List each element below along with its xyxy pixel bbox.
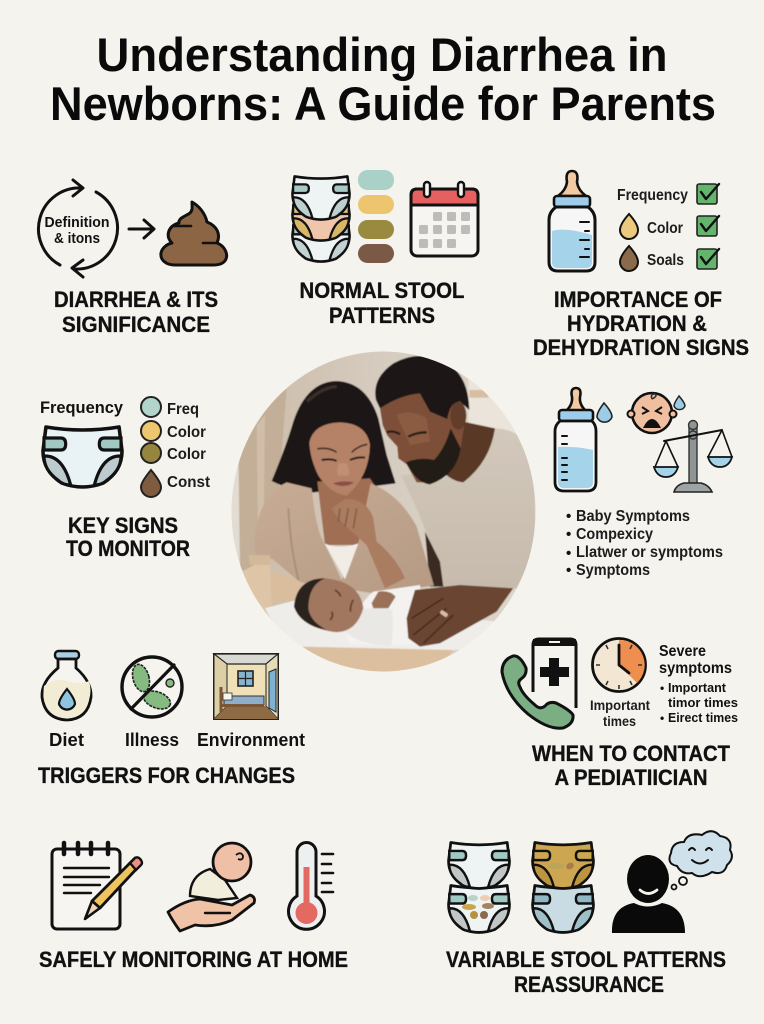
woman hair xyxy=(272,381,396,492)
heading: TO MONITOR xyxy=(66,536,190,561)
icon: baby in hand xyxy=(168,843,254,931)
icon: stacked diapers xyxy=(292,176,350,262)
heading xyxy=(532,741,730,790)
severe symptoms list: symptoms xyxy=(659,660,732,677)
legend xyxy=(141,397,211,497)
man neck xyxy=(446,422,496,483)
heading: SIGNIFICANCE xyxy=(62,312,210,337)
checklist xyxy=(617,184,719,271)
icon: definition cycle xyxy=(38,180,118,277)
man hand xyxy=(407,585,513,647)
baby hand xyxy=(372,591,396,608)
heading: REASSURANCE xyxy=(514,972,664,997)
icon: crying baby xyxy=(628,393,685,433)
heading: VARIABLE STOOL PATTERNS xyxy=(446,947,726,972)
icon labels: Illness xyxy=(125,730,179,750)
man ear xyxy=(450,402,466,430)
heading xyxy=(66,513,190,561)
heading xyxy=(446,947,726,997)
woman hand and arm xyxy=(332,499,405,588)
symptom list: • xyxy=(566,526,571,543)
man beard xyxy=(406,428,461,484)
woman face xyxy=(309,422,370,496)
label: important times: times xyxy=(603,713,636,729)
heading: IMPORTANCE OF xyxy=(554,287,722,312)
icon: phone with medical cross xyxy=(502,639,576,728)
severe symptoms list: Important xyxy=(668,680,727,695)
man hair xyxy=(375,356,469,419)
heading xyxy=(300,278,465,328)
checklist: Soals xyxy=(647,252,684,269)
heading: NORMAL STOOL xyxy=(300,278,465,303)
icon: notepad and pencil xyxy=(52,843,142,929)
icon: definition cycle: & itons xyxy=(54,231,100,247)
dark gap beside man's arm xyxy=(425,532,443,587)
arrow xyxy=(129,220,154,238)
label: important times: Important xyxy=(590,697,650,713)
legend: Const xyxy=(167,474,211,491)
colour swatches xyxy=(358,170,394,263)
icon: thermometer xyxy=(288,843,333,929)
baby body xyxy=(362,584,421,612)
icon: diaper xyxy=(43,427,122,487)
label: frequency: Frequency xyxy=(40,398,124,417)
panel: safely monitoring at home xyxy=(39,843,348,972)
heading: PATTERNS xyxy=(329,303,435,328)
icon labels: Environment xyxy=(197,730,305,750)
panel: when to contact a pediatrician xyxy=(502,638,738,790)
heading: HYDRATION & xyxy=(567,311,707,336)
title: Understanding Diarrhea in xyxy=(96,28,668,81)
heading: KEY SIGNS xyxy=(68,513,178,538)
label: important times xyxy=(590,697,650,729)
woman cardigan xyxy=(254,482,434,593)
crib rail xyxy=(302,646,453,672)
baby head xyxy=(294,578,363,632)
panel: importance of hydration xyxy=(533,171,749,360)
checklist: Frequency xyxy=(617,187,688,204)
severe symptoms list: • xyxy=(660,681,664,695)
title xyxy=(50,28,716,130)
symptom list: Llatwer or symptoms xyxy=(576,544,723,561)
icon: calendar xyxy=(411,182,478,256)
panel: variable stool patterns reassurance xyxy=(446,831,732,997)
heading xyxy=(533,287,749,360)
icon labels: Diet xyxy=(49,730,84,750)
panel: normal stool patterns xyxy=(292,170,478,328)
heading: A PEDIATIICIAN xyxy=(554,765,708,790)
panel: triggers for changes xyxy=(38,651,305,788)
panel: diarrhea and its significance xyxy=(38,180,227,337)
severe symptoms list: Severe xyxy=(659,643,706,660)
symptom list: • xyxy=(566,562,571,579)
severe symptoms list: Eirect times xyxy=(668,710,738,725)
woman top xyxy=(324,543,358,579)
icon: clock xyxy=(592,638,646,692)
legend: Freq xyxy=(167,401,199,418)
icon: balance scale xyxy=(654,420,732,492)
photo background xyxy=(230,345,540,675)
icon: environment room xyxy=(214,654,278,719)
icon: no germs xyxy=(122,657,182,717)
heading: DIARRHEA & ITS xyxy=(54,287,218,312)
heading: WHEN TO CONTACT xyxy=(532,741,730,766)
panel: key signs to monitor xyxy=(40,397,211,561)
icon labels xyxy=(49,730,305,750)
checklist: Color xyxy=(647,220,683,237)
man shirt xyxy=(401,428,535,588)
panel: photo of parents and newborn xyxy=(230,345,540,675)
icon: diet jug xyxy=(42,651,91,720)
symptom list: Baby Symptoms xyxy=(576,508,690,525)
icon: baby bottle xyxy=(549,171,595,271)
woman neck xyxy=(317,478,377,545)
symptom list: • xyxy=(566,508,571,525)
heading xyxy=(54,287,218,337)
icon: four diapers xyxy=(449,843,593,932)
severe symptoms list: timor times xyxy=(668,695,738,710)
icon: smiling person with thought cloud xyxy=(612,831,732,933)
mattress xyxy=(265,600,497,650)
severe symptoms list xyxy=(659,643,738,725)
icon: definition cycle: Definition xyxy=(44,215,110,231)
crib side xyxy=(242,564,272,610)
heading: SAFELY MONITORING AT HOME xyxy=(39,947,348,972)
legend: Color xyxy=(167,446,206,463)
symptom list: Compexicy xyxy=(576,526,653,543)
panel: dehydration symptoms xyxy=(555,388,732,579)
man face xyxy=(380,388,465,482)
symptom list xyxy=(566,508,723,579)
icon: bottle with drop xyxy=(555,388,612,491)
severe symptoms list: • xyxy=(660,711,664,725)
title: Newborns: A Guide for Parents xyxy=(50,77,716,130)
icon: stool xyxy=(161,202,227,265)
symptom list: Symptoms xyxy=(576,562,650,579)
symptom list: • xyxy=(566,545,571,562)
heading: TRIGGERS FOR CHANGES xyxy=(38,763,295,788)
legend: Color xyxy=(167,424,206,441)
